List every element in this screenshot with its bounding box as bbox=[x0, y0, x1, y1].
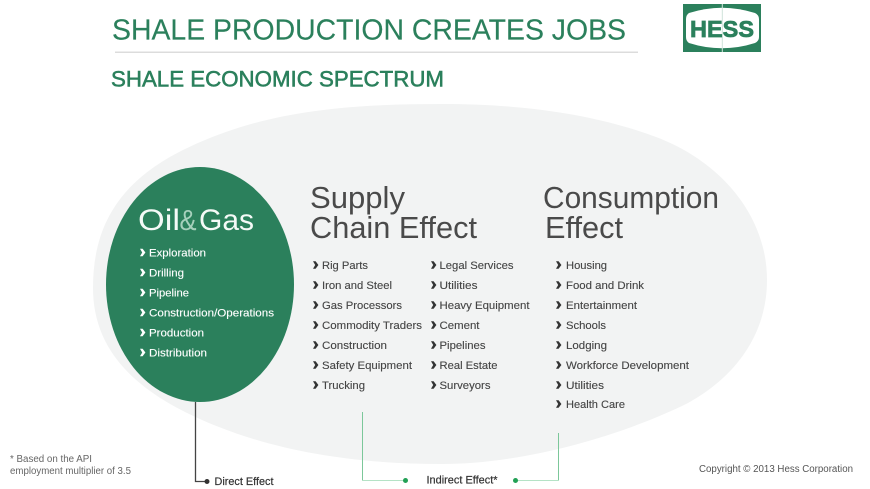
list: supply chain column two bbox=[431, 260, 530, 392]
footnote: employment multiplier of 3.5 bbox=[10, 466, 131, 477]
label: indirect effect: Indirect Effect* bbox=[426, 474, 498, 486]
list: oil and gas activities: Distribution bbox=[149, 348, 207, 360]
footnote: * Based on the API bbox=[10, 454, 92, 465]
heading: consumption effect bbox=[543, 180, 719, 245]
list: supply chain column one: Trucking bbox=[322, 380, 365, 392]
label: direct effect: Direct Effect bbox=[214, 476, 274, 488]
list: consumption effect: Housing bbox=[566, 260, 607, 272]
heading: supply chain effect: Chain Effect bbox=[310, 210, 477, 245]
list: consumption effect: Schools bbox=[566, 320, 607, 332]
list: supply chain column two: Legal Services bbox=[440, 260, 514, 272]
list: supply chain column one: Construction bbox=[322, 340, 387, 352]
heading: consumption effect: Consumption bbox=[543, 180, 719, 215]
list: supply chain column two: Pipelines bbox=[440, 340, 486, 352]
list: consumption effect: Lodging bbox=[566, 340, 607, 352]
list: supply chain column two: Real Estate bbox=[440, 360, 498, 372]
list: supply chain column one: Gas Processors bbox=[322, 300, 403, 312]
subtitle: SHALE ECONOMIC SPECTRUM bbox=[111, 66, 444, 92]
list: supply chain column two: Cement bbox=[440, 320, 480, 332]
list: supply chain column one: Rig Parts bbox=[322, 260, 368, 272]
list: supply chain column one: Safety Equipment bbox=[322, 360, 412, 372]
list: oil and gas activities: Production bbox=[149, 328, 204, 340]
list: consumption effect bbox=[556, 260, 689, 411]
list: oil and gas activities: Pipeline bbox=[149, 288, 189, 300]
list: oil and gas activities: Construction/Operations bbox=[149, 308, 275, 320]
heading: oil and gas: & bbox=[180, 205, 196, 237]
heading: supply chain effect bbox=[310, 180, 477, 245]
list: oil and gas activities: Exploration bbox=[149, 248, 206, 260]
heading: supply chain effect: Supply bbox=[310, 180, 405, 215]
footnote bbox=[10, 454, 131, 477]
list: supply chain column one: Iron and Steel bbox=[322, 280, 392, 292]
list: oil and gas activities bbox=[140, 248, 275, 360]
logo: Hess: HESS bbox=[690, 16, 754, 42]
list: consumption effect: Utilities bbox=[566, 380, 605, 392]
panel: oil and gas bbox=[106, 167, 294, 402]
title: SHALE PRODUCTION CREATES JOBS bbox=[112, 14, 626, 46]
panel: economic spectrum background bbox=[93, 104, 767, 464]
list: supply chain column two: Utilities bbox=[440, 280, 478, 292]
list: consumption effect: Entertainment bbox=[566, 300, 637, 312]
copyright: Copyright © 2013 Hess Corporation bbox=[699, 464, 853, 475]
arrow: direct effect connector bbox=[196, 402, 210, 484]
heading: oil and gas: Gas bbox=[199, 204, 254, 237]
heading: oil and gas bbox=[138, 204, 254, 237]
heading: oil and gas: Oil bbox=[138, 204, 180, 237]
list: oil and gas activities: Drilling bbox=[149, 268, 184, 280]
arrow: indirect effect connector left bbox=[362, 412, 408, 483]
list: supply chain column one bbox=[313, 260, 423, 392]
list: consumption effect: Food and Drink bbox=[566, 280, 645, 292]
list: consumption effect: Health Care bbox=[566, 399, 625, 411]
list: supply chain column two: Heavy Equipment bbox=[440, 300, 530, 312]
heading: consumption effect: Effect bbox=[545, 210, 623, 245]
logo: Hess bbox=[683, 4, 761, 52]
list: consumption effect: Workforce Development bbox=[566, 360, 689, 372]
list: supply chain column two: Surveyors bbox=[440, 380, 491, 392]
arrow: indirect effect connector right bbox=[513, 433, 559, 483]
list: supply chain column one: Commodity Traders bbox=[322, 320, 423, 332]
